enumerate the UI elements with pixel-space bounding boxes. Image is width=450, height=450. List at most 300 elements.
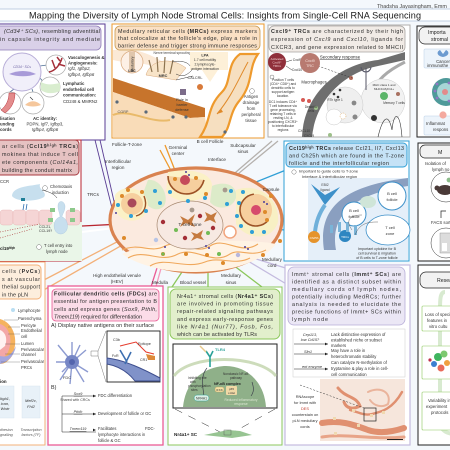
title: Mapping the Diversity of Lymph Node Stromal Cells: Insights from Single-Cell RNA Sequencing [29, 10, 421, 20]
panel: perivascular cells [0, 262, 45, 445]
labels: follicle diagram: zone [386, 231, 395, 236]
inset: TLR4 signalling: IFKK [216, 388, 223, 392]
text box: PvC description: s at vascular [2, 277, 40, 283]
box: protocol variability: experiment [426, 404, 448, 409]
inset: TLR4 signalling: Inhibiting site [188, 376, 207, 380]
arrows: MRC signalling [172, 61, 193, 80]
gene box: adhesion: ican, [1, 401, 9, 406]
inset: TLR4 signalling: with [190, 380, 196, 384]
map labels: TRCs [87, 192, 100, 197]
labels: follicle diagram: of B cells to T-zone follicle [356, 256, 398, 260]
inset: TLR4 signalling: response [234, 402, 248, 406]
text: lymphatic communication: endothelial cell [63, 87, 94, 92]
icon: CD34 stromal cell: CD34⁺ SCs [13, 65, 31, 69]
inset: TLR4 signalling: sites [191, 388, 198, 392]
box: cancer immunotherapy: immunothe [427, 63, 449, 68]
text: antigen drainage: tissue [245, 118, 257, 123]
diagram: gene tree: Tmem119 [70, 427, 87, 431]
text box: Ccl19 right description: Ccl19ʰⁱᵍʰ TRCs release Ccl21, Il7, Cxcl13 [289, 144, 404, 152]
text: antigen drainage: drainage [243, 100, 260, 105]
text box: MRC description [115, 26, 260, 50]
icon: activated Cxcl9 TRC: Activated [271, 57, 284, 61]
text box: Cxcl9 description [269, 26, 405, 52]
label: CCL21 CCL19: CCL19? [39, 229, 52, 233]
gene box: transcription factors: Fhl2 [27, 404, 36, 409]
icon: FDC cell [56, 342, 88, 384]
labels: secondary response cells: Dendritic [305, 105, 318, 109]
text: RNAscope caption: RNAscope [296, 394, 314, 399]
labels: secondary response cells: CXCL9 [304, 134, 314, 138]
icon: Cxcl9 TRC: TRC [306, 64, 314, 68]
box: loss of features: vitro cultu [429, 324, 448, 329]
inset: TLR4 signalling: TLR4 [215, 347, 226, 352]
table: gene roles [293, 329, 405, 377]
text: T cell positioning notes: positioning CXCR3⁺ [268, 120, 298, 124]
text: angiogenesis: Igfbp4, Igfbp6 [68, 72, 95, 77]
map labels: Interface [208, 157, 226, 162]
diagram: gene tree: Shared with CRCs [60, 398, 90, 402]
callout: LPA: 2.lymphocyte- [194, 62, 216, 66]
gene box: adhesion [0, 386, 14, 418]
text box: MRC description: that colocalize at the follicle's edge, play a role in [118, 36, 257, 42]
text: AC identity: AC identity: [33, 116, 58, 121]
labels: follicle diagram: Ch25h [310, 236, 319, 240]
box: inflammatory response: respons [433, 127, 448, 132]
icon: activated Cxcl9 TRC: TRCs [273, 64, 281, 68]
text box: PvC description: thelial support [2, 284, 40, 290]
box: UMAP [422, 346, 450, 379]
diagram: gene tree: Pthlh [74, 410, 82, 414]
text: role in barrier defense: Role in [176, 98, 188, 102]
text box: Ccl19 right description: follicle and the interfollicular region [289, 161, 389, 167]
caption: gene box categories: factors (TF) [21, 433, 41, 437]
text: AC identity [26, 116, 64, 132]
text: angiogenesis [68, 55, 105, 77]
text: T cell positioning notes: regions [278, 128, 289, 132]
box: loss of features: features in [427, 318, 448, 323]
legend: vessel parts: channel [21, 352, 36, 357]
text box: Ccl19 description: ete components (Col14a1, [2, 160, 78, 166]
text: isolation: Isolation of [425, 161, 447, 166]
label: CCL21 CCL19: CCL21, [39, 225, 51, 229]
labels: follicle diagram: ligand [320, 188, 330, 192]
callout: LPA: 1.7 cell motility [194, 58, 216, 62]
map labels: sinus [238, 149, 249, 154]
inset: TLR4 signalling: phosphorylation [188, 384, 211, 388]
text: T cell positioning notes: Position T cells [272, 78, 294, 82]
text: RNAscope caption: for Immt with [294, 400, 316, 405]
interfollicular patches [142, 180, 166, 209]
labels: secondary response cells: RTh type 1 [327, 98, 343, 102]
text box: Immt description: precise functions of Immt+ SCs within [292, 310, 401, 316]
text box: Immt description: Immt⁺ stromal cells (Immt⁺ SCs) are [292, 272, 401, 278]
heading pill: methods: M [438, 150, 442, 156]
inset: TLR4 signalling: NR4A1 [196, 396, 207, 400]
text: T-zone guidance: Interface & interfollicular region [302, 174, 357, 179]
inset: TLR4 signalling: c-Rel [228, 391, 235, 395]
central lymph node connector lines [42, 140, 292, 291]
icon: medullary LRC [121, 51, 143, 73]
map labels: Subcapsular [230, 143, 256, 148]
labels: follicle diagram: follicle [348, 214, 360, 219]
text: role in barrier defense [175, 98, 189, 112]
icon: Cxcl9 TRC: Cxcl9 [305, 59, 315, 63]
labels: follicle diagram: EBI2 [321, 183, 329, 187]
text box: Cd34 description: (Cd34⁺ SCs), resembling adventitial [4, 29, 100, 35]
zoom dashes [175, 409, 275, 433]
map labels: High endothelial venule [93, 273, 141, 278]
icon: MRC fan: MRC [159, 74, 168, 78]
text box: Immt description: medullary cords of lymph nodes, [292, 287, 402, 293]
text: angiogenesis: Igf1, Igfbp2, [68, 66, 91, 71]
table: gene roles: ent enzyme [302, 364, 323, 369]
follicles [233, 187, 279, 233]
text: angiogenesis: Angiogenesis: [68, 60, 98, 66]
text: chemotaxis: induction [52, 190, 69, 195]
labels: secondary response cells: MHCII-Myh11+ [374, 87, 394, 91]
diagram: gene tree: follicle & GC [98, 438, 121, 443]
box: loss of features: Loss of speci [425, 312, 450, 317]
inset: antigen epitope: Epitope [138, 342, 151, 346]
label: CCL21 CCL19 [39, 225, 52, 233]
table: gene roles: low Cd15? [301, 337, 320, 342]
legend: vessel parts: Endothelial [21, 328, 42, 333]
text box: Ccl19 description [0, 140, 79, 175]
text box: FDC description: Follicular dendritic cells (FDCs) are [54, 292, 157, 298]
diagram: gene tree: Sox9 [74, 392, 83, 396]
cells [116, 189, 266, 234]
text: T-zone guidance: Important to guide cells to T-zone [299, 168, 359, 174]
author line: Thadsha Jayasingham, Emm [377, 4, 447, 10]
text: lymphatic communication: Lymphatic [63, 81, 85, 86]
ring decoration [440, 292, 450, 434]
text box: Cd34 description [0, 26, 101, 50]
illustration: medullary tissue [113, 50, 258, 137]
text box: Immt description: potentially including MedRCs; further [292, 294, 401, 300]
gene box: adhesion: Wwtr [0, 406, 10, 411]
legend: lymphocyte and parenchyma: Lymphocyte [18, 308, 41, 313]
text box: FDC description: essential for antigen presentation to B [54, 299, 157, 305]
text: chemotaxis: Chemotaxis [50, 184, 72, 189]
table: gene roles: established niche or subset [331, 338, 383, 342]
icon: Nr4a1 stromal cell [204, 430, 252, 438]
inset: antigen epitope: CR1 [140, 358, 147, 362]
text box: Cxcl9 description: expression of Cxcl9 and Cxcl10, ligands for [271, 37, 403, 43]
icon: stromal tumour cell [432, 78, 450, 106]
table: gene roles: May have a role in [331, 348, 366, 353]
text box: PvC description: in the pLN [2, 292, 28, 298]
label: CALCRL: CALCRL [188, 76, 202, 80]
text box: Cd34 description: in capsule integrity and mediate [0, 37, 100, 43]
callout: LPA: antigen interaction [191, 67, 219, 71]
inset: antigen epitope [107, 331, 160, 382]
text box: Nr4a1 description: are involved in promoting tissue [177, 302, 273, 308]
diagram: gene tree: FDC- [145, 426, 155, 431]
table: gene roles: Sfn1 [304, 349, 312, 354]
map labels: Medulla [152, 280, 168, 285]
text box: Nr4a1 description: repair-related signaling pathways [177, 309, 273, 315]
text: T cell positioning notes: location. [277, 94, 289, 98]
map labels: Germinal [169, 145, 187, 150]
arrows: Cxcl9 and Cxcl10: Cxcl10 [292, 68, 302, 72]
text box: PvC description [0, 265, 41, 299]
icon: barrier receptors [180, 84, 203, 95]
text: T cell positioning notes: dendritic cells to [271, 86, 295, 90]
text: chemotaxis [43, 184, 72, 195]
label: macrophages: Macrophages [301, 80, 327, 84]
panel: methods [418, 143, 450, 261]
panel: importance of stromal cells [417, 26, 450, 137]
text box: Ccl19 description: mokines that induce T cell [2, 152, 78, 158]
legend: lymphocyte and parenchyma [11, 308, 42, 321]
micrograph: RNAscope tissue [300, 379, 405, 441]
icon: mouse [431, 172, 450, 202]
text: RNAscope caption: DES [301, 406, 309, 411]
legend: vessel parts: cell [21, 334, 27, 339]
panel: Ccl19high TRCs right [284, 141, 410, 261]
icon: MRC fan: Nerve terminal sprouting [154, 51, 191, 55]
labels: secondary response cells: cells [308, 109, 315, 113]
label: CCR7: CCR [0, 179, 9, 184]
legend: vessel parts: PRCs [21, 365, 32, 370]
text box: FDC description: Tmem119) required for differentiation [54, 314, 142, 320]
map labels: B cell Follicle [197, 139, 224, 144]
labels: follicle diagram: T cell [385, 225, 395, 230]
callout box [91, 331, 106, 382]
label: CGRP: CGRP [118, 110, 129, 114]
text box: PvC description: cells (PvCs) [2, 269, 40, 275]
text: role in barrier defense: barrier [177, 103, 188, 107]
legend: lymphocyte and parenchyma: Parenchyma [18, 316, 42, 321]
map labels: center [172, 151, 185, 156]
text box: Immt description: identified as a distinct subset within [292, 280, 401, 286]
map labels: region [112, 165, 125, 170]
panel: follicular dendritic cells [48, 286, 163, 445]
label: Nr4a1+ SC: Nr4a1+ SC [174, 432, 198, 437]
text: T cell entry: lymph node [46, 249, 68, 254]
heading pill: research [420, 272, 450, 288]
box: inflammatory response [424, 111, 450, 135]
text: antigen drainage [241, 89, 261, 123]
text box: MRC description: Medullary reticular cells (MRCs) express markers [118, 29, 257, 35]
heading: secondary response: Secondary response [320, 54, 361, 60]
text: angiogenesis: Vasculogenesis & [68, 55, 105, 60]
text: RNAscope caption: pLN medullary [292, 418, 318, 423]
text box: Immt description: lymph node [292, 317, 328, 323]
map labels: T-cell zone [178, 222, 202, 228]
labels: follicle diagram: cell survival & migration [358, 252, 396, 256]
gene box: adhesion: Itgb1, [0, 396, 10, 401]
text: T cell positioning notes: resting LN, & [273, 116, 293, 120]
text: antigen drainage: peripheral [241, 112, 261, 117]
heading: B: B) [51, 385, 57, 391]
legend: vessel parts: Perivascular [21, 359, 45, 364]
text: T cell positioning notes: DC1 induces CD4⁺ [269, 100, 297, 104]
diagram: gene tree: FDC differentiation [98, 393, 133, 398]
text: RNAscope caption: counterstain on [292, 412, 318, 417]
icon: activated Cxcl9 TRC [268, 53, 286, 71]
map labels: sinus [226, 280, 237, 285]
table: gene roles: Cep113, [303, 332, 317, 337]
caption: gene box categories [0, 428, 42, 437]
text box: Nr4a1 description: Nr4a1⁺ stromal cells (Nr4a1⁺ SCs) [177, 294, 273, 300]
icon: lymphatic circle [40, 77, 60, 97]
text: role in barrier defense: defense [175, 108, 189, 112]
text: T cell positioning notes: gene processing, [270, 108, 296, 112]
text: localisation: lisation [0, 116, 15, 121]
legend: vessel parts: Perivascular [21, 347, 45, 352]
lymph node diagram [110, 168, 282, 272]
illustration: secondary response [301, 52, 405, 137]
text box: Nr4a1 description: and express early-response genes [177, 317, 273, 323]
text: T cell positioning notes [268, 75, 298, 132]
text box: FDC description [52, 289, 159, 321]
map labels: Interfollicular [105, 159, 131, 164]
text: AC identity: PDPN, Igf7, Igfbp3, [26, 122, 64, 126]
text: T cell positioning notes: T cell tolerance via [269, 104, 297, 108]
text: lymphatic communication: communication: [63, 92, 97, 98]
inset: TLR4 signalling: Reduced inflammatory [225, 398, 258, 402]
diagram: gene tree [60, 392, 155, 443]
map labels: cord [268, 263, 277, 268]
inset: TLR4 signalling [173, 344, 277, 408]
map labels: Capsule [263, 187, 280, 192]
text: lymphatic communication: CD248 & MMRN2 [63, 99, 98, 104]
illustration: T cell entry [0, 184, 82, 261]
illustration: B and T cell follicle [308, 178, 410, 260]
heading pill: importance: Importa [428, 30, 446, 36]
text box: FDC description: cells and express genes (Sox9, Pthlh, [54, 307, 157, 313]
map labels: Medullary [221, 273, 242, 278]
table: gene roles: markers [331, 343, 346, 348]
text box: Immt description [288, 267, 405, 325]
text: T cell positioning notes: support antigen [272, 90, 295, 94]
inset: TLR4 signalling: NF-κB complex [214, 382, 242, 386]
text: T cell positioning notes: to interfollicular [272, 124, 295, 128]
gene box: transcription factors [22, 386, 40, 418]
table: gene roles: Lack distinctive expression of [331, 332, 386, 337]
text box: Cxcl9 description: CXCR3, and gene expression related to MHCII [271, 45, 403, 51]
box: cancer immunotherapy: Cancer [436, 59, 450, 64]
table: gene roles: cell communication [331, 372, 367, 377]
gene box: transcription factors: Mef2c, [25, 398, 37, 403]
diagram: gene tree: lymphocyte interactions in [98, 432, 146, 437]
T-cell zone [157, 201, 223, 249]
inset: TLR4 signalling: Nonclassic NF-κB [223, 372, 248, 376]
labels: follicle diagram: Important cytokine for B [358, 247, 397, 251]
icon: Cxcl9 TRC [300, 53, 352, 78]
callout: LPA: LPA [201, 54, 209, 58]
table: gene roles: Can catalyze N-methylation of [331, 360, 388, 365]
panel: Nr4a1+ stromal cells [168, 287, 282, 445]
panel: Cxcl9+ TRCs [268, 25, 410, 138]
arrows: Cxcl9 and Cxcl10 [286, 58, 302, 72]
icon: vessel wall circle [0, 92, 21, 114]
text: AC identity: Igfbp4, Igfbp6 [32, 127, 59, 132]
legend: vessel parts [21, 323, 45, 370]
text box: Nr4a1 description [170, 289, 280, 339]
panel: Cd34+ stromal cells [0, 24, 105, 140]
labels: follicle diagram: B cell [349, 208, 359, 213]
map labels: Blood vessel [180, 280, 206, 285]
text box: Nr4a1 description: which can be activated by TLRs [176, 332, 257, 338]
text: localisation: unding [0, 122, 15, 126]
legend: vessel parts: Lumen [21, 341, 34, 346]
labels: follicle diagram: TRCs [341, 235, 349, 239]
table: gene roles: heterochromatin stability [331, 354, 377, 359]
caption: gene box categories: Transcription [20, 428, 42, 432]
labels: follicle diagram: follicle [386, 197, 398, 202]
panel: medullary reticular cells [112, 24, 264, 138]
arrows: Cxcl9 and Cxcl10: Cxcl9 [293, 58, 301, 62]
text box: Immt description: analysis is needed to elucidate the [292, 302, 401, 308]
text: RNAscope caption: cords [300, 424, 310, 429]
panel: research challenges [418, 265, 450, 445]
text: T cell positioning notes: (CD4⁺ CD8⁺) and [270, 82, 296, 86]
text box: Ccl19 description: ar cells (Ccl19ʰⁱᵍʰ TRCs) [2, 142, 78, 150]
text: localisation [0, 116, 15, 132]
vessel cross-section [0, 319, 20, 364]
inset: TLR4 signalling: pathway [230, 376, 242, 380]
labels: secondary response cells: MHC class 1 and [373, 83, 396, 87]
icon: medullary LRC: Medullary [130, 56, 134, 72]
box: protocol variability [422, 392, 450, 430]
text: lymphatic communication [63, 81, 98, 104]
text box: Ccl19 right description: and Ch25h which are found in the T-zone [289, 154, 404, 160]
callout: LPA [190, 52, 228, 82]
map labels: Medullary [262, 257, 283, 262]
medulla [122, 241, 276, 272]
label: Ccl19 high: cl19ʰⁱᵍʰ [0, 244, 15, 251]
icon: activated Cxcl9 TRC: Cxcl9⁺ [272, 60, 282, 64]
icon: blood vessel circle [46, 55, 66, 75]
text: T cell entry: T cell entry into [44, 243, 73, 248]
arrow: next step [441, 211, 446, 218]
box: protocol variability: protocols [431, 410, 448, 415]
map labels: (HEV) [111, 279, 124, 284]
text: T cell entry [37, 243, 73, 254]
capsule [110, 168, 282, 272]
icon: MRC fan [146, 51, 191, 80]
heading pill: importance [419, 27, 450, 44]
inset: antigen epitope: FcR [112, 354, 119, 358]
icon: FACS machine [431, 228, 450, 258]
text: antigen drainage: from [247, 106, 256, 111]
inset: antigen epitope: C3b [113, 338, 120, 342]
labels: secondary response cells: Memory T cells [383, 101, 405, 105]
legend: vessel parts: Pericyte [21, 323, 37, 328]
text: isolation [425, 161, 450, 172]
box: inflammatory response: Inflammat [426, 121, 446, 126]
labels: secondary response cells: CXCL10 [298, 129, 310, 133]
diagram: gene tree: Development of follicle or GC [98, 411, 151, 416]
text: isolation: lymph no [432, 167, 450, 172]
box: loss of features [422, 306, 450, 331]
panel: Ccl19high TRCs left [0, 140, 82, 261]
heading pill: importance: stromal [431, 37, 448, 43]
labels: secondary response cells [298, 83, 405, 138]
text: T-zone guidance [292, 168, 359, 179]
text: antigen drainage: Antigen [244, 94, 259, 99]
table: gene roles: tryptamine & play a role in cell- [331, 366, 389, 371]
inset: TLR4 signalling: p65 [229, 387, 234, 391]
text box: MRC description: barrier defense and trigger strong immune responses [118, 44, 257, 50]
heading: function: ion [0, 379, 7, 384]
panel: Immt+ stromal cells [285, 265, 410, 445]
text: RNAscope caption [292, 394, 318, 429]
map labels: Follicle-T-zone [112, 142, 142, 147]
map labels [87, 139, 283, 285]
